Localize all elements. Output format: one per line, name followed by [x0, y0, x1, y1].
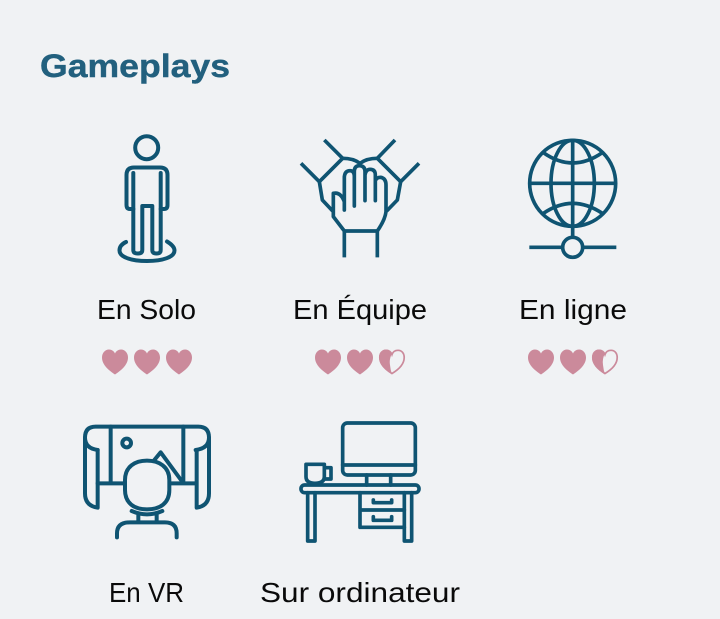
icon: standing person — [120, 136, 174, 261]
rating: two and a half hearts — [528, 350, 617, 374]
label: Sur ordinateur — [260, 577, 460, 608]
icon: computer desk — [301, 423, 419, 541]
label: En VR — [109, 577, 184, 608]
panel: sur ordinateur — [260, 423, 460, 608]
label: En ligne — [519, 294, 627, 325]
panel: en solo — [97, 136, 196, 374]
label: En Équipe — [293, 294, 427, 325]
panel: en equipe — [293, 140, 427, 374]
icon: network globe — [529, 140, 616, 257]
rating: three hearts — [102, 350, 192, 374]
icon: stacked hands — [301, 140, 419, 257]
rating: two and a half hearts — [315, 350, 404, 374]
icon: VR player — [85, 427, 209, 537]
label: En Solo — [97, 294, 196, 325]
title: Gameplays — [40, 48, 230, 84]
panel: en vr — [85, 427, 209, 608]
panel: en ligne — [519, 140, 627, 374]
